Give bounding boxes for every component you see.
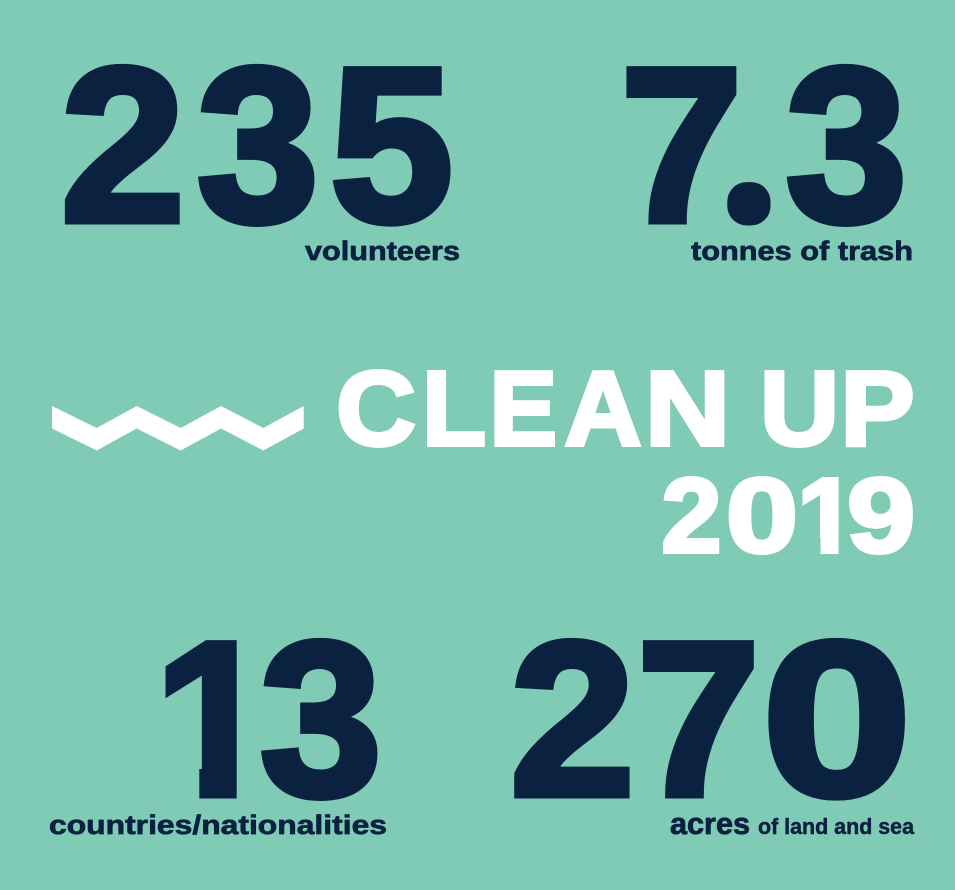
number: 7.3: 3 [786,22,907,268]
title line: CLEAN UP: U [760,350,839,468]
title line: CLEAN UP: A [564,350,642,468]
label: acres: acres [670,806,750,841]
icon: white zigzag wave [52,406,304,450]
number: 7.3: . [745,180,753,213]
number: 235: 5 [330,22,453,268]
title line: 2019: 2 [662,457,722,575]
number: 13: 3 [260,596,382,842]
number: 270: 7 [637,596,760,842]
title line: 2019: 9 [847,457,915,575]
title line: 2019: 0 [726,457,798,575]
title: Clean Up 2019 [336,350,915,575]
label: tonnes of trash: tonnes of trash [691,236,913,266]
title line: 2019: 1 [797,457,856,575]
title line: CLEAN UP: E [490,350,557,468]
title line: CLEAN UP: L [422,350,486,468]
number: 270: 2 [510,596,635,842]
number: 13 [130,596,382,842]
number: 235: 3 [197,22,319,268]
number: 7.3: 7 [620,22,742,268]
number: 235: 2 [61,22,185,268]
label: of land and sea: of land and sea [758,814,915,839]
title line: CLEAN UP: P [840,350,914,468]
number: 270: 0 [762,596,912,842]
label: countries/nationalities: countries/nationalities [49,810,387,840]
title line: 2019 [662,457,915,575]
title line: CLEAN UP: C [336,350,416,468]
stat: countries/nationalities [49,596,387,842]
stat: acres of land and sea [510,596,915,842]
stat: tonnes of trash [620,22,913,268]
stat: volunteers [61,22,460,268]
label: volunteers: volunteers [305,236,460,266]
title line: CLEAN UP: N [645,350,730,468]
number: 13: 1 [154,596,276,842]
